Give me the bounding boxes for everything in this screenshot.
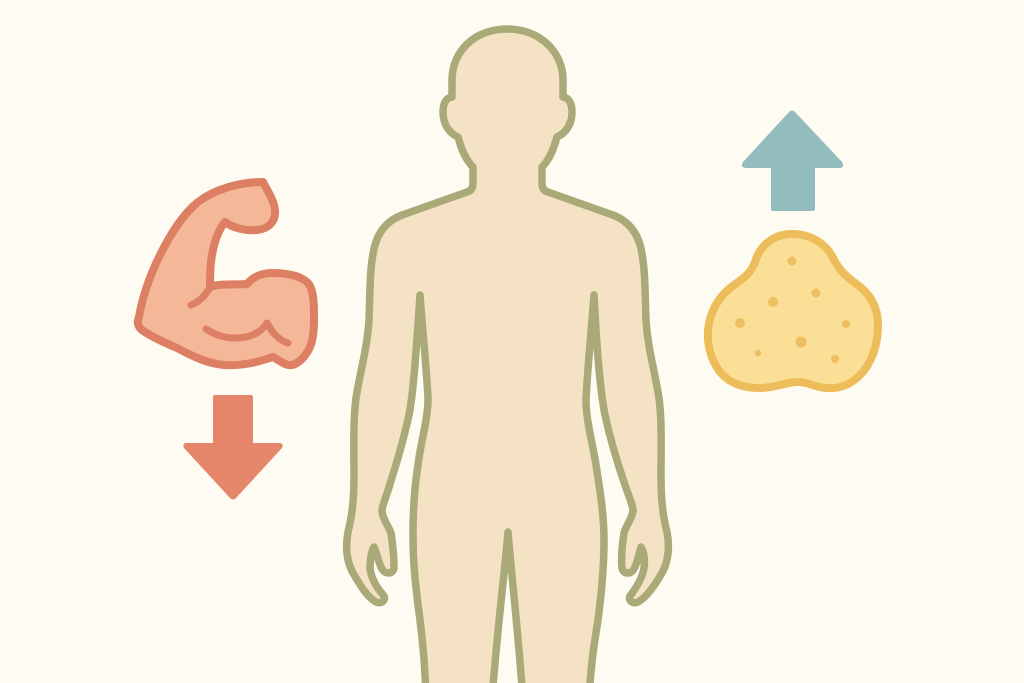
muscle crease lines xyxy=(191,287,288,343)
fat cell dots xyxy=(735,256,850,363)
icon: flexed arm muscle xyxy=(138,182,314,365)
arrow: down, muscle decreasing xyxy=(183,395,283,500)
arrow: up, fat increasing xyxy=(742,110,843,211)
icon: fat cell xyxy=(708,234,878,388)
human body silhouette xyxy=(347,29,668,683)
